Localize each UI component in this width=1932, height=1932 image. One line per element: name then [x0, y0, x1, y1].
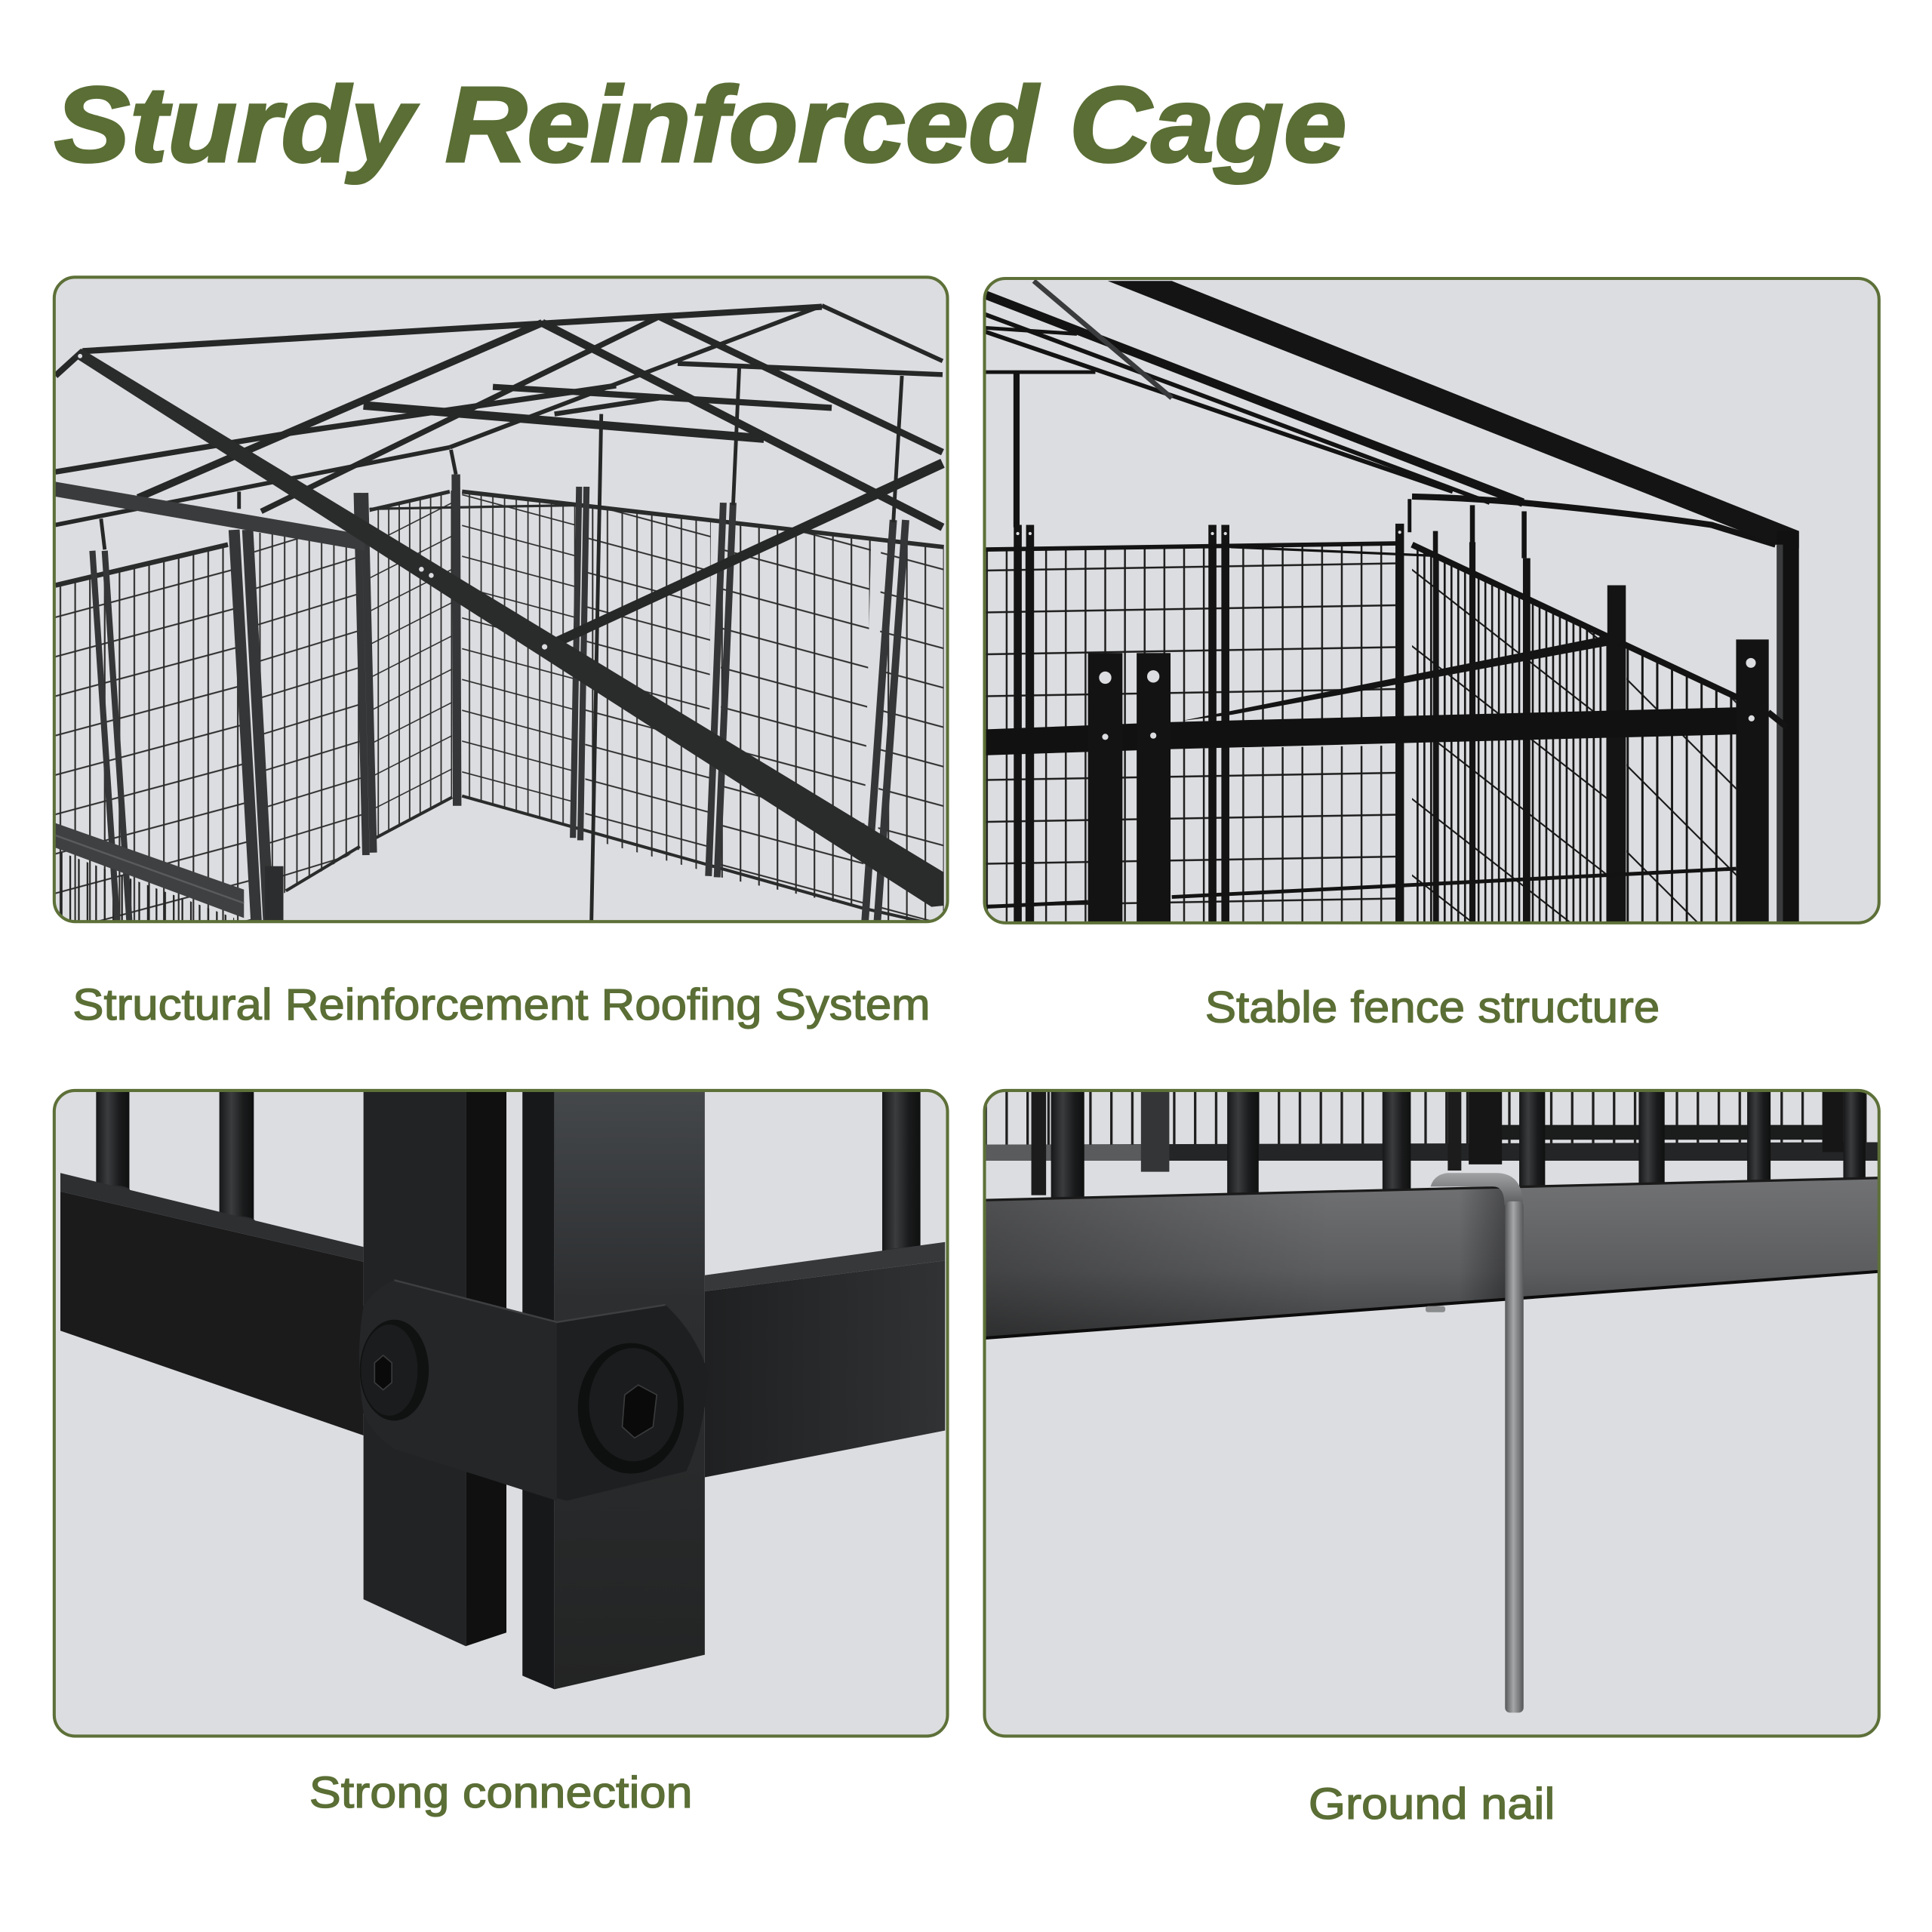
main rail — [984, 1178, 1878, 1338]
round bars — [96, 1091, 921, 1258]
nail shadow — [1459, 1188, 1508, 1301]
background posts — [1141, 1091, 1843, 1172]
mesh walls — [55, 491, 944, 924]
caption: ground nail: Ground nail — [1309, 1780, 1555, 1829]
lower front rail and post stub — [55, 823, 284, 925]
front posts with holes — [1088, 639, 1769, 924]
left rail — [60, 1173, 364, 1435]
front rafter — [72, 349, 944, 907]
illustration: bolted corner joint — [60, 1091, 945, 1689]
background fence bars — [984, 1091, 1879, 1145]
fence posts — [92, 475, 906, 921]
title: Sturdy Reinforced Cage — [54, 65, 1346, 185]
caption: structural reinforcement: Structural Reinforcement Roofing System — [72, 980, 931, 1029]
caption: stable fence: Stable fence structure — [1205, 983, 1660, 1032]
corner post — [1777, 531, 1799, 925]
brace — [1182, 633, 1622, 721]
mesh rails — [55, 491, 944, 927]
roof trusses — [55, 306, 943, 528]
rear posts — [1018, 524, 1617, 924]
rear post holes — [1016, 531, 1401, 535]
front cross beam — [55, 481, 365, 551]
diagonal pipe — [557, 463, 943, 642]
panel: ground nail — [984, 1091, 1879, 1736]
mesh walls — [984, 543, 1736, 924]
illustration: ground nail on rail — [984, 1091, 1879, 1712]
gray brace pipe — [1034, 281, 1172, 398]
panel border — [54, 277, 948, 921]
rafter holes — [78, 354, 547, 650]
fence rails — [984, 543, 1786, 907]
main rafter — [1108, 281, 1799, 549]
ground nail — [1431, 1173, 1524, 1712]
panel border — [984, 1091, 1879, 1736]
caption: strong connection: Strong connection — [309, 1768, 693, 1817]
thick cross beam — [984, 707, 1739, 755]
panel: strong connection — [54, 1091, 948, 1736]
roof uprights — [101, 368, 902, 921]
panel border — [54, 1091, 948, 1736]
right rail — [705, 1242, 945, 1478]
panel: stable fence structure — [984, 278, 1879, 925]
left post — [364, 1091, 506, 1646]
background rails — [984, 1125, 1878, 1161]
panel: structural reinforcement roofing system — [54, 277, 948, 927]
right post — [522, 1091, 705, 1689]
bolt nub — [1426, 1306, 1445, 1312]
illustration: roof frame and mesh walls — [55, 306, 944, 927]
illustration: fence corner — [984, 281, 1799, 925]
panel border — [984, 278, 1879, 923]
bolt left — [360, 1320, 429, 1420]
foreground round bars — [1032, 1091, 1866, 1199]
connecting plate — [359, 1280, 709, 1501]
roof rafters — [984, 294, 1776, 567]
bolt right — [578, 1343, 684, 1474]
